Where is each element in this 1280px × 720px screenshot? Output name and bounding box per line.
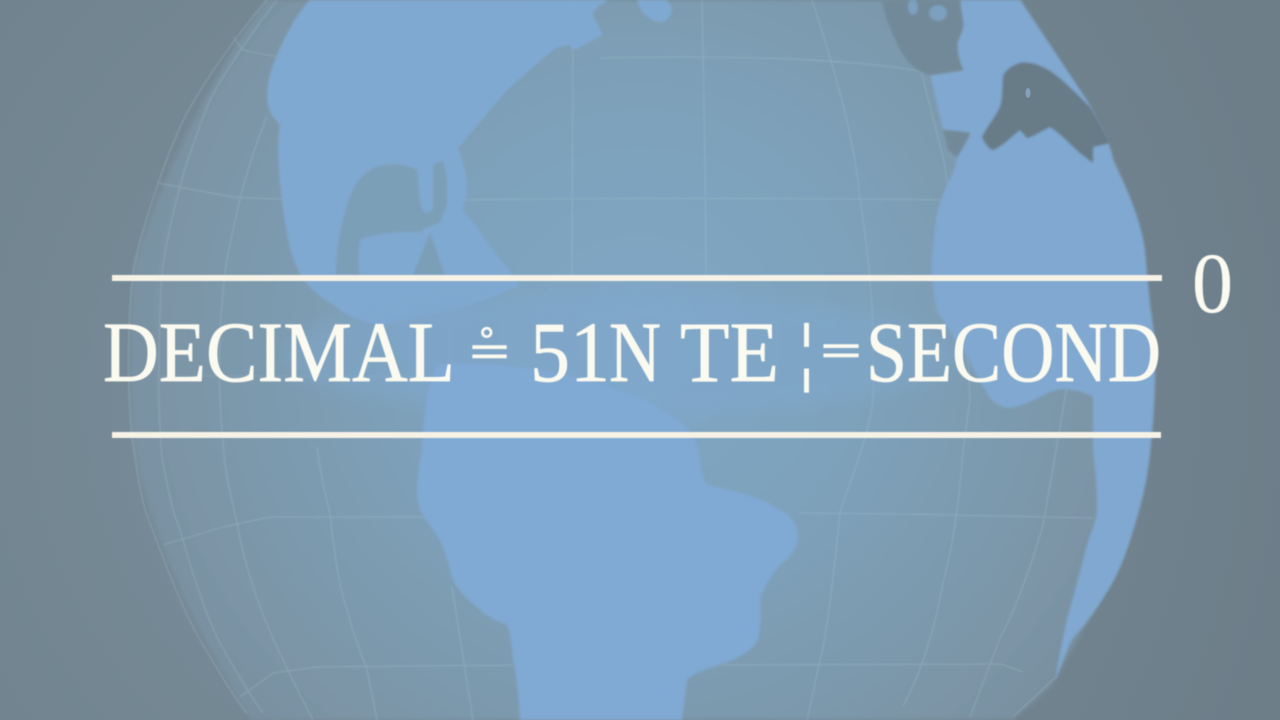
symbol: equals two: = bbox=[821, 325, 861, 376]
band haze bbox=[280, 293, 960, 417]
title rule top bbox=[112, 275, 1162, 281]
title rule bottom bbox=[112, 432, 1161, 438]
word: TE: TE bbox=[680, 304, 779, 400]
symbol: broken bar: ¦ bbox=[799, 310, 814, 393]
word: SECOND: SECOND bbox=[866, 304, 1161, 400]
land: Gulf of Mexico bbox=[336, 160, 447, 275]
letter: N: N bbox=[609, 304, 661, 400]
title text bbox=[103, 235, 1233, 400]
land: North Atlantic sea bbox=[882, 0, 963, 75]
land: Mediterranean highlight bbox=[1026, 88, 1030, 98]
land: South America bbox=[417, 363, 798, 720]
land: North America bbox=[267, 0, 610, 325]
land: Mediterranean Sea bbox=[982, 63, 1110, 163]
word: DECIMAL: DECIMAL bbox=[103, 304, 455, 400]
land: Biscay inlet bbox=[943, 130, 970, 157]
word: 51: 51 bbox=[530, 304, 610, 400]
land: Greenland bbox=[637, 0, 672, 22]
symbol: ring: ° bbox=[480, 321, 494, 358]
globe grid lines bbox=[128, 0, 1093, 720]
land: Scandinavia spots bbox=[908, 0, 947, 21]
land: Africa and Europe bbox=[930, 0, 1155, 680]
digit: 0: 0 bbox=[1192, 235, 1233, 331]
land: Central America haze bbox=[380, 300, 470, 400]
symbol: equals one: = bbox=[470, 326, 509, 377]
